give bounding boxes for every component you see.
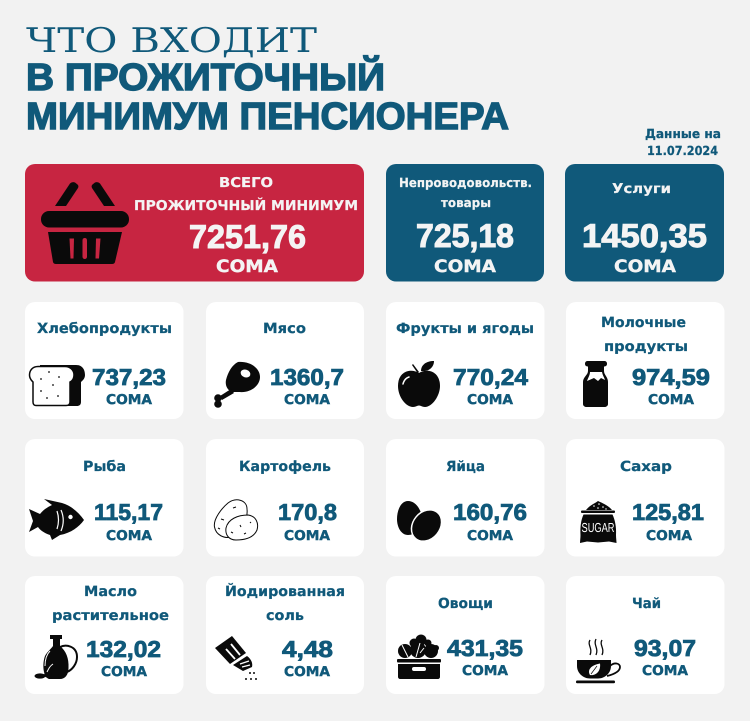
total labels: ВСЕГО: [219, 175, 273, 191]
panel: meat: Мясо: [263, 321, 306, 337]
panel: services: Услуги: [612, 181, 671, 197]
panel: tea: СОМА: [642, 663, 689, 679]
panel: eggs: Яйца: [446, 459, 485, 475]
panel: vegetable oil: [25, 576, 184, 694]
panel: iodized salt: [206, 576, 364, 694]
panel: iodized salt: соль: [266, 608, 304, 624]
panel: bread: Хлебопродукты: [37, 321, 172, 337]
panel: bread: СОМА: [106, 392, 153, 408]
icon: meat: [214, 362, 260, 408]
panel: total subsistence minimum: СОМА: [216, 257, 279, 277]
panel: non-food goods: Непроводовольств.: [399, 175, 532, 190]
title line 2: В ПРОЖИТОЧНЫЙ: [26, 55, 385, 99]
panel: total subsistence minimum: [25, 164, 364, 282]
panel: meat: 1360,7: [270, 364, 344, 390]
panel: vegetable oil: растительное: [52, 608, 169, 624]
panel: non-food goods: товары: [441, 195, 491, 210]
panel: vegetables: [386, 576, 544, 694]
title line 3: МИНИМУМ ПЕНСИОНЕРА: [26, 96, 509, 138]
panel: dairy: Молочные: [601, 315, 686, 331]
icon: sugar bag: SUGAR: [582, 520, 614, 535]
panel: dairy: [566, 302, 724, 419]
panel: potatoes: Картофель: [239, 459, 331, 475]
panel: fish: СОМА: [106, 528, 153, 544]
panel: bread: 737,23: [92, 364, 166, 390]
panel: vegetable oil: Масло: [84, 584, 137, 600]
panel: dairy: СОМА: [648, 392, 695, 408]
panel: fruits and berries: Фрукты и ягоды: [396, 321, 534, 337]
icon: fish: [29, 499, 84, 540]
panel: fish: Рыба: [83, 459, 126, 475]
panel: tea: Чай: [632, 596, 661, 612]
icon: basket: [41, 182, 129, 264]
panel: total subsistence minimum: ПРОЖИТОЧНЫЙ МИНИМУМ: [134, 197, 358, 214]
panel: fish: [25, 439, 184, 556]
total value: 7251,76: [189, 218, 306, 255]
panel: fish: 115,17: [94, 499, 163, 525]
panel: iodized salt: Йодированная: [225, 583, 345, 600]
title: [26, 21, 509, 138]
panel: dairy: продукты: [604, 339, 688, 355]
panel: sugar: СОМА: [646, 528, 693, 544]
icon: vegetable crate: [397, 634, 441, 679]
panel: sugar: [566, 439, 724, 556]
date note: Данные на: [645, 126, 721, 141]
panel: eggs: [386, 439, 544, 556]
icon: sugar bag: [580, 501, 616, 543]
panel: fruits and berries: 770,24: [453, 364, 528, 390]
panel: potatoes: СОМА: [284, 528, 331, 544]
panel: vegetables: 431,35: [447, 635, 523, 661]
panel: iodized salt: СОМА: [284, 664, 331, 680]
panel: non-food goods: 725,18: [416, 217, 514, 254]
panel: bread: [25, 302, 184, 419]
panel: meat: СОМА: [284, 392, 331, 408]
icon: salt shaker: [215, 636, 257, 680]
panel: fruits and berries: СОМА: [467, 392, 514, 408]
panel: vegetables: СОМА: [462, 663, 509, 679]
panel: eggs: СОМА: [467, 528, 514, 544]
panel: potatoes: [206, 439, 364, 556]
icon: oil jug: [34, 635, 77, 679]
panel: iodized salt: 4,48: [282, 636, 333, 662]
panel: sugar: 125,81: [632, 499, 704, 525]
panel: vegetable oil: СОМА: [101, 664, 148, 680]
icon: milk bottle: [583, 361, 608, 407]
date note: [645, 126, 721, 158]
title line 1: ЧТО ВХОДИТ: [26, 21, 317, 61]
panel: services: СОМА: [614, 257, 677, 277]
panel: dairy: 974,59: [632, 364, 710, 390]
panel: services: 1450,35: [582, 217, 707, 254]
icon: apple: [398, 361, 440, 407]
icon: tea cup: [576, 639, 620, 683]
panel: vegetables: Овощи: [438, 596, 493, 612]
icon: potatoes: [214, 500, 258, 540]
icon: eggs: [397, 501, 448, 547]
date note: 11.07.2024: [647, 143, 718, 158]
panel: non-food goods: [386, 164, 544, 282]
panel: fruits and berries: [386, 302, 544, 419]
panel: services: [565, 164, 724, 282]
panel: sugar: Сахар: [620, 459, 672, 475]
panel: eggs: 160,76: [453, 499, 527, 525]
panel: potatoes: 170,8: [278, 499, 337, 525]
panel: vegetable oil: 132,02: [86, 636, 161, 662]
panel: non-food goods: СОМА: [434, 257, 497, 277]
panel: tea: [566, 576, 724, 694]
icon: bread: [30, 365, 85, 406]
panel: meat: [206, 302, 364, 419]
panel: tea: 93,07: [634, 635, 696, 661]
